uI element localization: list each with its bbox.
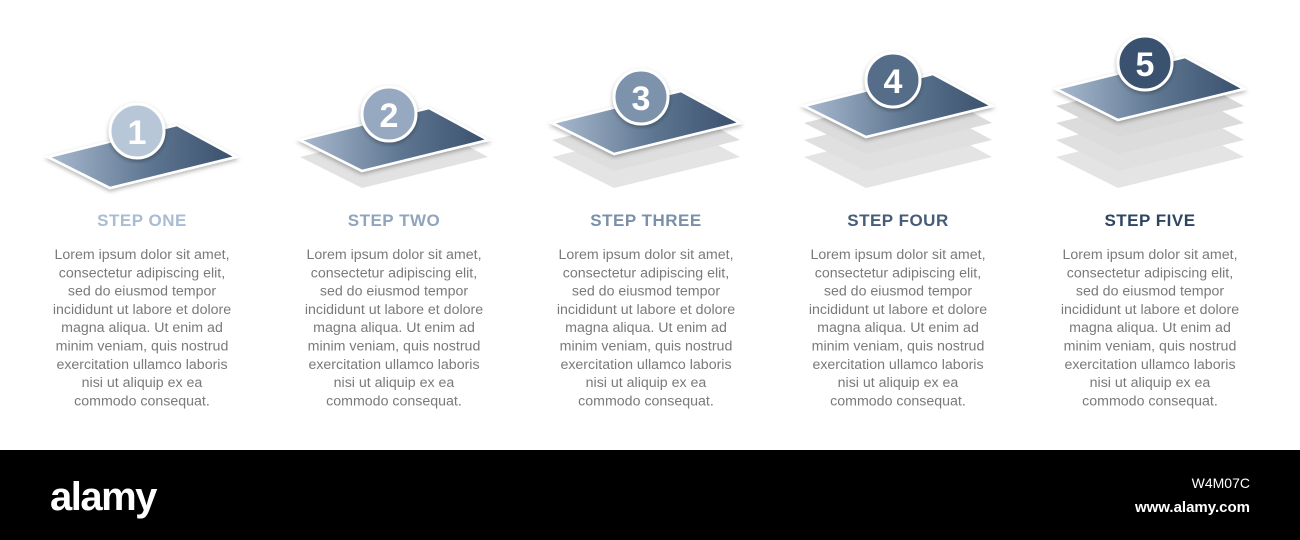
url: www.alamy.com (1134, 499, 1250, 516)
text 4: consectetur adipiscing elit, (815, 265, 981, 281)
text 5: sed do eiusmod tempor (1076, 284, 1224, 300)
badge 3: 3 (632, 80, 650, 118)
step 4 (804, 53, 992, 188)
step 2 (300, 87, 488, 188)
text 4: Lorem ipsum dolor sit amet, (810, 247, 986, 263)
text 2: minim veniam, quis nostrud (308, 338, 480, 354)
text 5: minim veniam, quis nostrud (1064, 338, 1236, 354)
text 2: magna aliqua. Ut enim ad (313, 320, 475, 336)
text 3: nisi ut aliquip ex ea (586, 375, 706, 391)
text 1: nisi ut aliquip ex ea (82, 375, 202, 391)
footer bar (0, 450, 1300, 540)
text 4: minim veniam, quis nostrud (812, 338, 984, 354)
plate 5 (1056, 57, 1244, 120)
plate 2 (300, 108, 488, 171)
text 4: exercitation ullamco laboris (812, 357, 984, 373)
badge 2 (362, 87, 416, 141)
text 2: nisi ut aliquip ex ea (334, 375, 454, 391)
text 1: Lorem ipsum dolor sit amet, (54, 247, 230, 263)
title 1: STEP ONE (97, 211, 187, 230)
title 5: STEP FIVE (1104, 211, 1196, 230)
text 1: magna aliqua. Ut enim ad (61, 320, 223, 336)
text 2: Lorem ipsum dolor sit amet, (306, 247, 482, 263)
image id: W4M07C (1192, 475, 1250, 491)
badge 1 (110, 104, 164, 158)
step 5 (1056, 36, 1244, 188)
text 4: nisi ut aliquip ex ea (838, 375, 958, 391)
text 3: commodo consequat. (578, 393, 714, 409)
badge 5 (1118, 36, 1172, 90)
step 3 (552, 70, 740, 188)
text 3: minim veniam, quis nostrud (560, 338, 732, 354)
text 4: commodo consequat. (830, 393, 966, 409)
badge 4 (866, 53, 920, 107)
text 3: incididunt ut labore et dolore (557, 302, 735, 318)
text 3: consectetur adipiscing elit, (563, 265, 729, 281)
text 4: sed do eiusmod tempor (824, 284, 972, 300)
text 1: exercitation ullamco laboris (56, 357, 228, 373)
text 3: Lorem ipsum dolor sit amet, (558, 247, 734, 263)
logo: alamy (50, 475, 158, 519)
text 4: magna aliqua. Ut enim ad (817, 320, 979, 336)
text 1: consectetur adipiscing elit, (59, 265, 225, 281)
text 1: incididunt ut labore et dolore (53, 302, 231, 318)
text 1: sed do eiusmod tempor (68, 284, 216, 300)
text 3: sed do eiusmod tempor (572, 284, 720, 300)
text 2: exercitation ullamco laboris (308, 357, 480, 373)
title 2: STEP TWO (348, 211, 440, 230)
plate 1 (48, 125, 236, 188)
text 4: incididunt ut labore et dolore (809, 302, 987, 318)
text 5: magna aliqua. Ut enim ad (1069, 320, 1231, 336)
plate 3 (552, 91, 740, 154)
text 2: sed do eiusmod tempor (320, 284, 468, 300)
badge 5: 5 (1136, 46, 1154, 84)
badge 3 (614, 70, 668, 124)
badge 1: 1 (128, 114, 146, 152)
text 5: nisi ut aliquip ex ea (1090, 375, 1210, 391)
title 4: STEP FOUR (847, 211, 949, 230)
text 3: exercitation ullamco laboris (560, 357, 732, 373)
text 1: minim veniam, quis nostrud (56, 338, 228, 354)
plate 4 (804, 74, 992, 137)
text 5: consectetur adipiscing elit, (1067, 265, 1233, 281)
title 3: STEP THREE (590, 211, 702, 230)
text 5: Lorem ipsum dolor sit amet, (1062, 247, 1238, 263)
text 3: magna aliqua. Ut enim ad (565, 320, 727, 336)
text 1: commodo consequat. (74, 393, 210, 409)
text 2: consectetur adipiscing elit, (311, 265, 477, 281)
text 5: incididunt ut labore et dolore (1061, 302, 1239, 318)
badge 4: 4 (884, 63, 903, 101)
text 5: exercitation ullamco laboris (1064, 357, 1236, 373)
text 5: commodo consequat. (1082, 393, 1218, 409)
step 1 (48, 104, 236, 409)
text 2: commodo consequat. (326, 393, 462, 409)
text 2: incididunt ut labore et dolore (305, 302, 483, 318)
badge 2: 2 (380, 97, 398, 135)
